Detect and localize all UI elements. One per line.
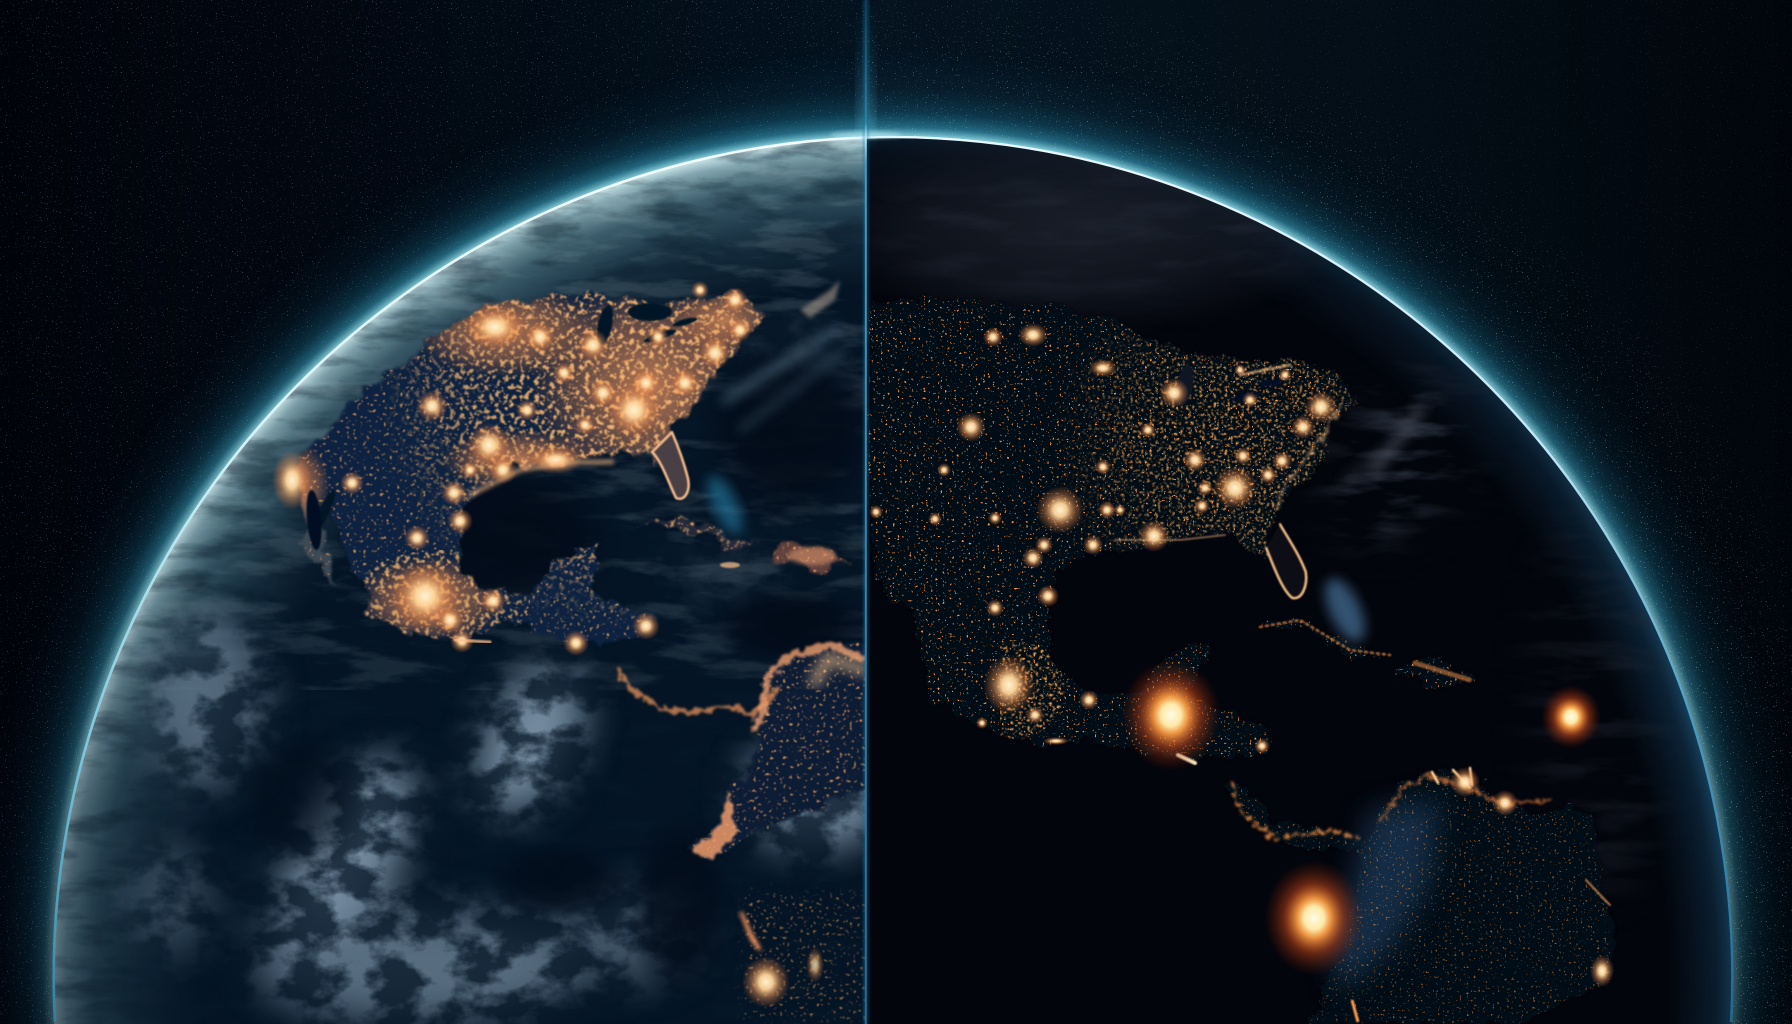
dark ocean base [866,130,1736,1024]
islands and central america lights [1178,620,1470,840]
major city glows [869,323,1337,754]
upper dim haze [810,115,1350,335]
florida peninsula [652,432,689,499]
upper cap streaks [40,130,866,1024]
gulf and atlantic dark ocean [267,347,864,984]
land masses [868,300,1615,1024]
central divider with light beam [830,0,902,1024]
southern flame lights [741,895,865,1020]
limb blue band [866,130,1736,1024]
south america blue cloud [1330,800,1440,990]
great lakes [304,303,698,550]
cloud underlayer [152,644,864,1024]
newfoundland and bahamas [701,280,840,568]
bright limb band [40,130,866,1024]
right hemisphere: dimmed earth [810,115,1736,1024]
glowing gulf coast [455,462,612,642]
cloud systems [116,317,865,1024]
ocean base [40,130,866,1024]
major city glows [272,281,752,656]
southern spark [1352,1000,1358,1022]
atlantic grey cloud [1345,410,1420,480]
lit coastlines [1115,365,1340,540]
warm urban haze [294,290,766,640]
south america glowing coast [694,645,865,860]
city light speckle [298,288,865,1024]
left hemisphere: illuminated earth [40,130,885,1024]
atlantic cloud streak [725,330,845,430]
small light: southeast coast [1590,955,1614,987]
florida peninsula [1266,524,1306,598]
glowing orb: central america [1121,659,1221,771]
city light speckle [866,290,1610,1024]
glowing orb: south pacific coast [1264,860,1364,976]
central america coast lights [617,669,777,716]
faint cloud streaks [866,130,1736,1024]
south america lit rim [1382,767,1610,905]
bahamas cloud [1317,573,1373,647]
great lakes [1174,364,1281,406]
glowing orb: caribbean east [1541,685,1601,749]
land masses [289,293,868,863]
